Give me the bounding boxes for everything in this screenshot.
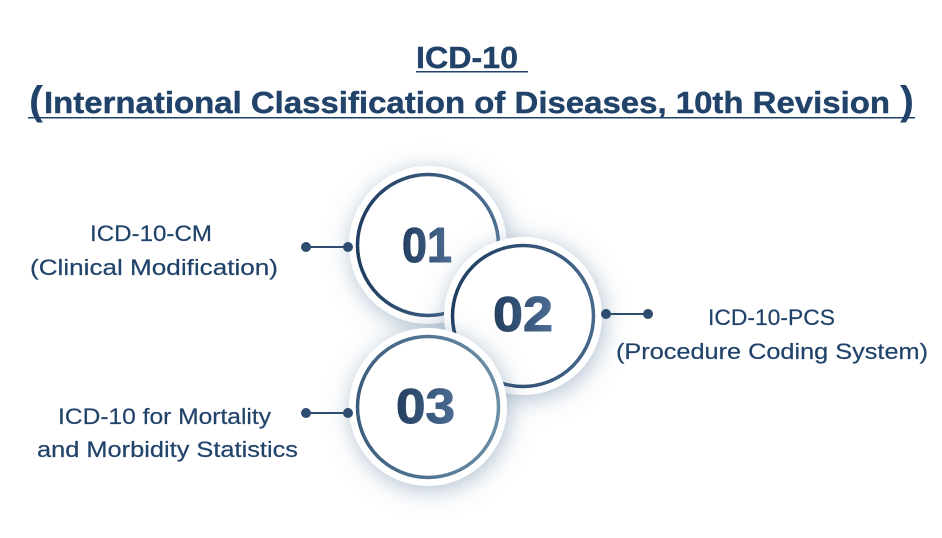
connector: item 3 bbox=[301, 408, 353, 418]
circle 03: 03 bbox=[396, 380, 455, 434]
title line 2: International Classification of Diseases, 10th Revision bbox=[44, 85, 890, 120]
label: ICD-10-PCS: ICD-10-PCS bbox=[708, 305, 835, 330]
label: ICD-10 for Mortality and Morbidity Statistics bbox=[37, 404, 298, 462]
connector: item 2 bbox=[601, 309, 653, 319]
circle 01: 01 bbox=[402, 219, 452, 273]
label: ICD-10 for Mortality and Morbidity Statistics: and Morbidity Statistics bbox=[37, 437, 298, 462]
label: ICD-10-CM: (Clinical Modification) bbox=[30, 255, 278, 280]
title bbox=[28, 40, 915, 123]
label: ICD-10-CM: ICD-10-CM bbox=[90, 221, 212, 246]
title line 2: ( bbox=[29, 79, 44, 123]
label: ICD-10-PCS: (Procedure Coding System) bbox=[616, 339, 928, 364]
label: ICD-10-CM bbox=[30, 221, 278, 280]
circle 01 bbox=[349, 166, 507, 324]
label: ICD-10-PCS bbox=[616, 305, 928, 364]
circle 02: 02 bbox=[493, 288, 553, 342]
circle 02 bbox=[444, 237, 602, 395]
title line 2: ) bbox=[900, 79, 914, 123]
circle 03 bbox=[349, 328, 507, 486]
connector: item 1 bbox=[301, 242, 353, 252]
label: ICD-10 for Mortality and Morbidity Statistics: ICD-10 for Mortality bbox=[58, 404, 271, 429]
title line 1: ICD-10 bbox=[416, 40, 518, 75]
